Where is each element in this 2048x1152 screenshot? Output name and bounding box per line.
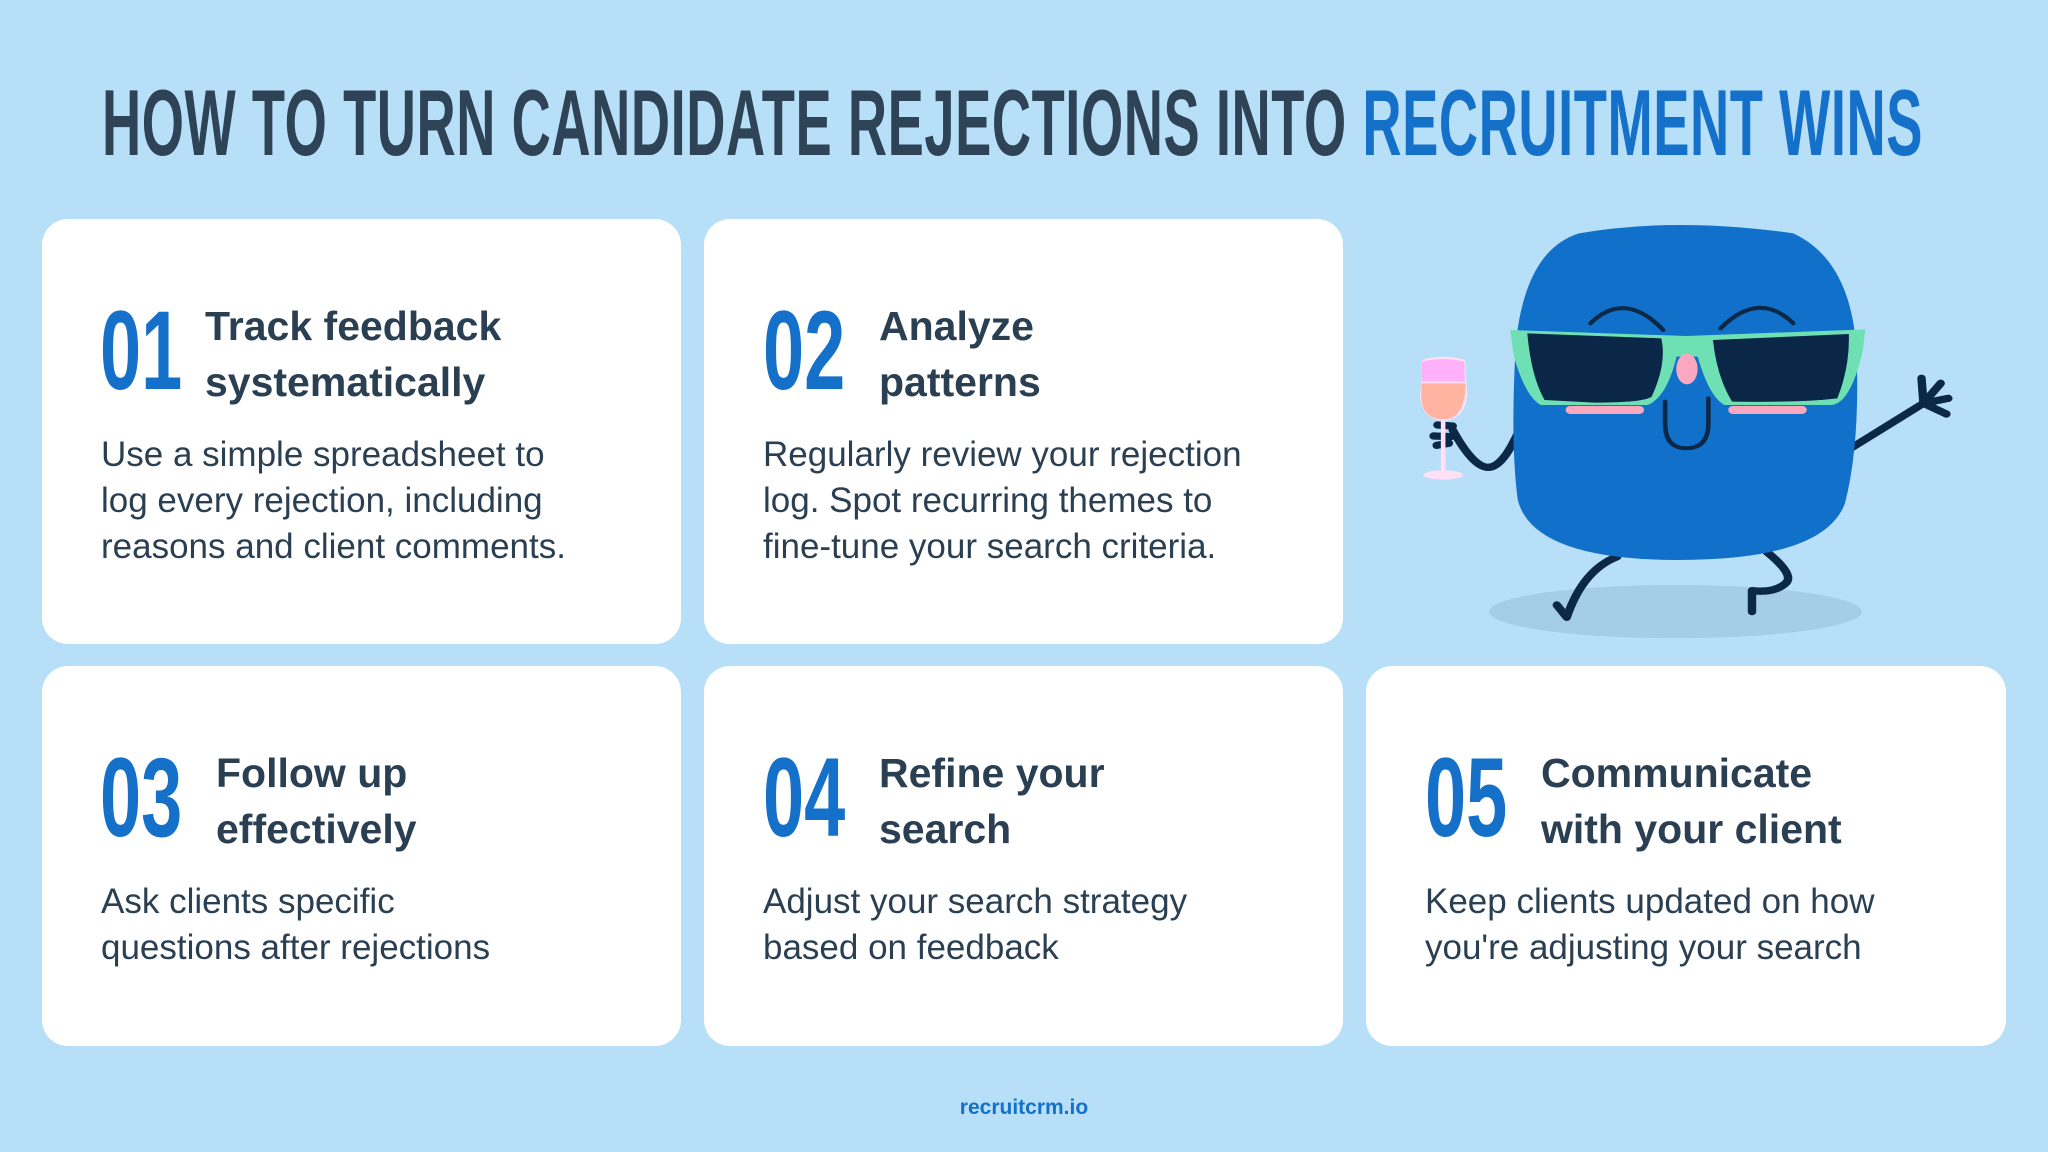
body 02 xyxy=(763,435,1242,566)
body 05: Keep clients updated on how xyxy=(1425,882,1874,921)
body 05: you're adjusting your search xyxy=(1425,928,1862,967)
body 01: Use a simple spreadsheet to xyxy=(101,435,545,474)
heading 04: search xyxy=(879,806,1011,852)
heading 04 xyxy=(879,750,1105,852)
heading 02 xyxy=(879,303,1041,405)
body 01 xyxy=(101,435,566,566)
heading 05: Communicate xyxy=(1541,750,1812,796)
body 01: log every rejection, including xyxy=(101,481,543,520)
heading 01 xyxy=(205,303,502,405)
heading 03: effectively xyxy=(216,806,417,852)
panel: step 02 xyxy=(704,219,1343,644)
number 04: 04 xyxy=(763,735,845,860)
body 02: Regularly review your rejection xyxy=(763,435,1242,474)
heading 02: Analyze xyxy=(879,303,1034,349)
body 02: fine-tune your search criteria. xyxy=(763,527,1216,566)
heading 03 xyxy=(216,750,417,852)
heading 03: Follow up xyxy=(216,750,407,796)
footer: recruitcrm.io xyxy=(960,1096,1088,1119)
panel: step 01 xyxy=(42,219,681,644)
heading 04: Refine your xyxy=(879,750,1105,796)
heading 02: patterns xyxy=(879,359,1041,405)
body 03: Ask clients specific xyxy=(101,882,395,921)
body 01: reasons and client comments. xyxy=(101,527,566,566)
body 03 xyxy=(101,882,490,967)
number 05: 05 xyxy=(1425,735,1507,860)
heading 05: with your client xyxy=(1541,806,1842,852)
panel: step 03 xyxy=(42,666,681,1046)
heading 01: systematically xyxy=(205,359,485,405)
body 03: questions after rejections xyxy=(101,928,490,967)
body 04: Adjust your search strategy xyxy=(763,882,1187,921)
panel: step 05 xyxy=(1366,666,2006,1046)
body 04 xyxy=(763,882,1187,967)
body 04: based on feedback xyxy=(763,928,1059,967)
body 05 xyxy=(1425,882,1875,967)
panel: step 04 xyxy=(704,666,1343,1046)
number 01: 01 xyxy=(100,288,182,413)
body 02: log. Spot recurring themes to xyxy=(763,481,1212,520)
heading 01: Track feedback xyxy=(205,303,501,349)
number 03: 03 xyxy=(100,735,182,860)
title: HOW TO TURN CANDIDATE REJECTIONS INTO RECRUITMENT WINS xyxy=(102,70,1923,175)
heading 05 xyxy=(1540,750,1842,852)
number 02: 02 xyxy=(763,288,845,413)
